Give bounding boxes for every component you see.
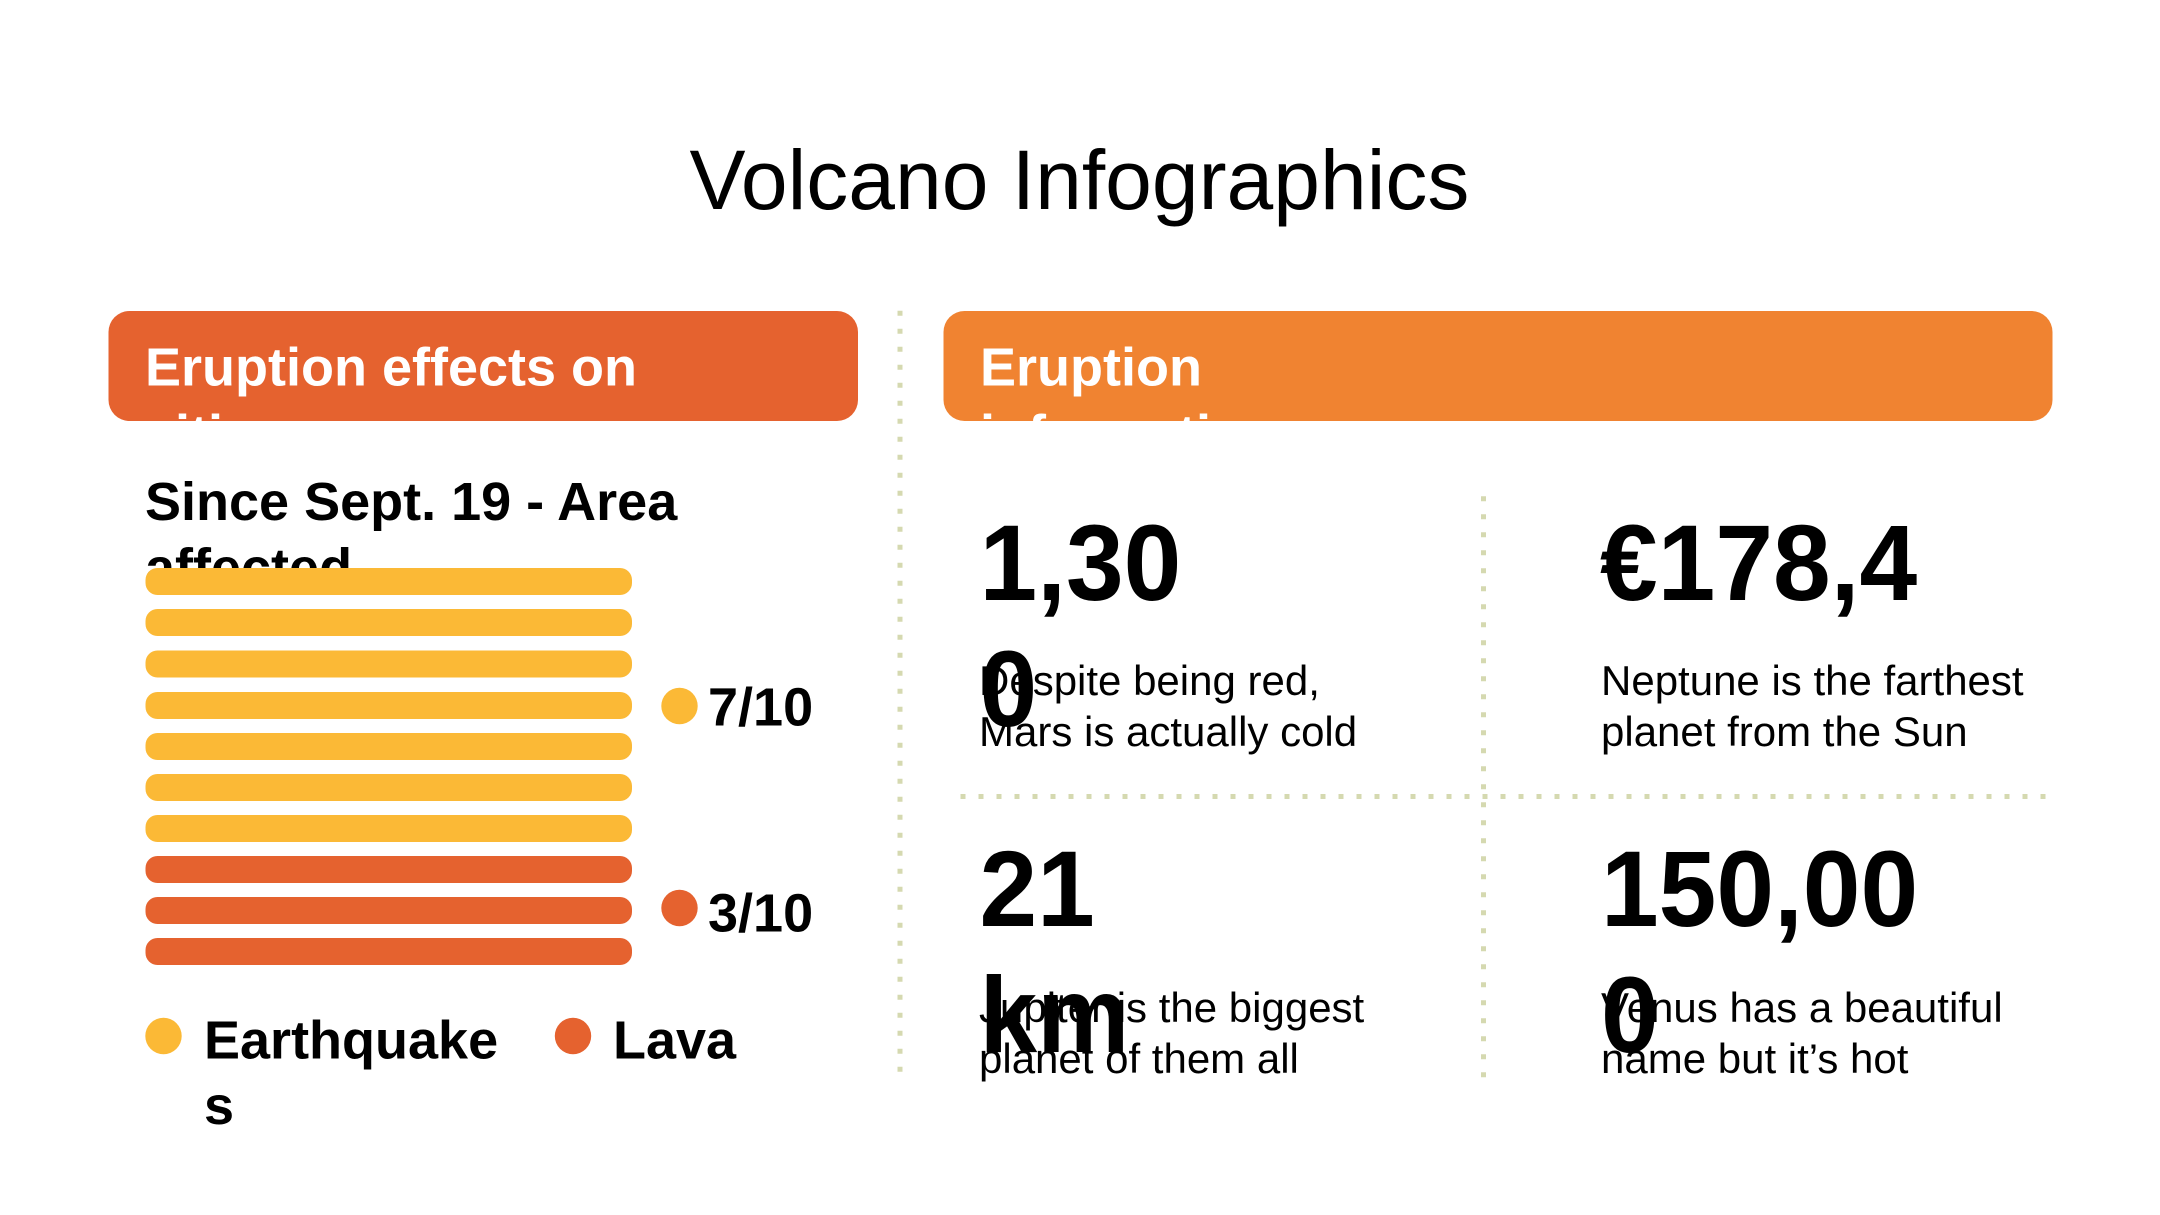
value: 3/10 — [661, 884, 813, 944]
stat: 21 km: 21 — [980, 829, 1095, 949]
subheading: Since Sept. 19 - Area — [145, 472, 678, 532]
stat: 21 km: Jupiter is the biggest — [979, 984, 1365, 1031]
title: Volcano Infographics — [690, 133, 1469, 227]
stat: €178,4: planet from the Sun — [1601, 708, 1968, 755]
stat: 150,000: 150,00 — [1601, 829, 1918, 949]
value: 7/10: 7/10 — [708, 678, 813, 738]
panel header: eruption information: information — [980, 404, 1277, 464]
legend: earthquakes: s — [204, 1076, 234, 1136]
stat: 1,300: 0 — [980, 629, 1037, 749]
stat: 150,000 — [1601, 829, 2003, 1082]
panel: eruption effects on cities — [108, 311, 858, 1136]
value: 7/10 — [661, 678, 813, 738]
stat: 150,000: name but it’s hot — [1601, 1035, 1909, 1082]
stat: 1,300 — [979, 503, 1357, 755]
panel: eruption information — [944, 311, 2052, 1082]
stat: €178,4: €178,4 — [1600, 503, 1917, 623]
bar chart — [146, 568, 632, 965]
panel header: eruption effects: cities — [145, 404, 283, 464]
legend: lava: Lava — [613, 1010, 737, 1070]
stat: 21 km: km — [980, 955, 1129, 1075]
stat: 21 km: planet of them all — [979, 1035, 1299, 1082]
legend: lava — [555, 1010, 737, 1070]
stat: 1,300: Despite being red, — [979, 657, 1320, 704]
subheading: affected — [145, 538, 352, 598]
panel header: eruption information: Eruption — [980, 338, 1202, 398]
stat: 150,000: Venus has a beautiful — [1601, 984, 2003, 1031]
subheading — [145, 472, 678, 598]
value: 3/10: 3/10 — [708, 884, 813, 944]
panel header: eruption effects — [108, 311, 858, 421]
stat: 150,000: 0 — [1601, 955, 1659, 1075]
stat: €178,4: Neptune is the farthest — [1601, 657, 2024, 704]
stat: 1,300: Mars is actually cold — [979, 708, 1357, 755]
stat: 21 km — [979, 829, 1365, 1082]
legend: earthquakes — [145, 1010, 498, 1136]
panel header: eruption effects: Eruption effects on — [145, 338, 637, 398]
stat: €178,4 — [1600, 503, 2024, 755]
legend: earthquakes: Earthquake — [204, 1010, 498, 1070]
panel header: eruption information — [944, 311, 2052, 421]
stat: 1,300: 1,30 — [980, 503, 1181, 623]
